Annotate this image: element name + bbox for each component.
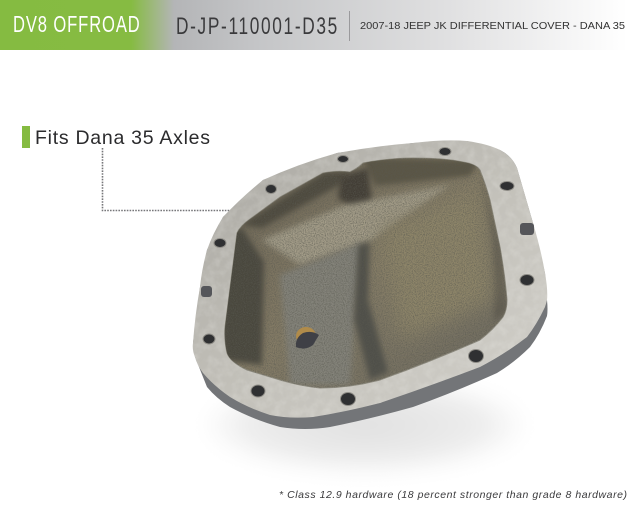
- cover skirt: [193, 141, 548, 429]
- callout text: Fits Dana 35 Axles: [35, 127, 210, 149]
- cavity shading: [220, 155, 515, 395]
- footnote: * Class 12.9 hardware (18 percent stronger than grade 8 hardware): [279, 489, 627, 501]
- header banner: [0, 0, 640, 50]
- ground shadow: [200, 375, 530, 475]
- alignment slots: [201, 223, 534, 297]
- green marker: [22, 126, 30, 148]
- flange face: [193, 140, 547, 418]
- product title: 2007-18 JEEP JK DIFFERENTIAL COVER - DANA 35: [360, 21, 625, 32]
- drain plug hole: [296, 327, 319, 349]
- flange mottling: [190, 138, 550, 423]
- dotted leader line: [102, 148, 230, 210]
- brand name: DV8 OFFROAD: [13, 12, 140, 38]
- cavity: [225, 158, 507, 388]
- callout: fits Dana 35 axles: [22, 126, 230, 210]
- bolt holes: [203, 148, 534, 406]
- part number: D-JP-110001-D35: [176, 13, 337, 40]
- differential cover illustration: [190, 138, 550, 475]
